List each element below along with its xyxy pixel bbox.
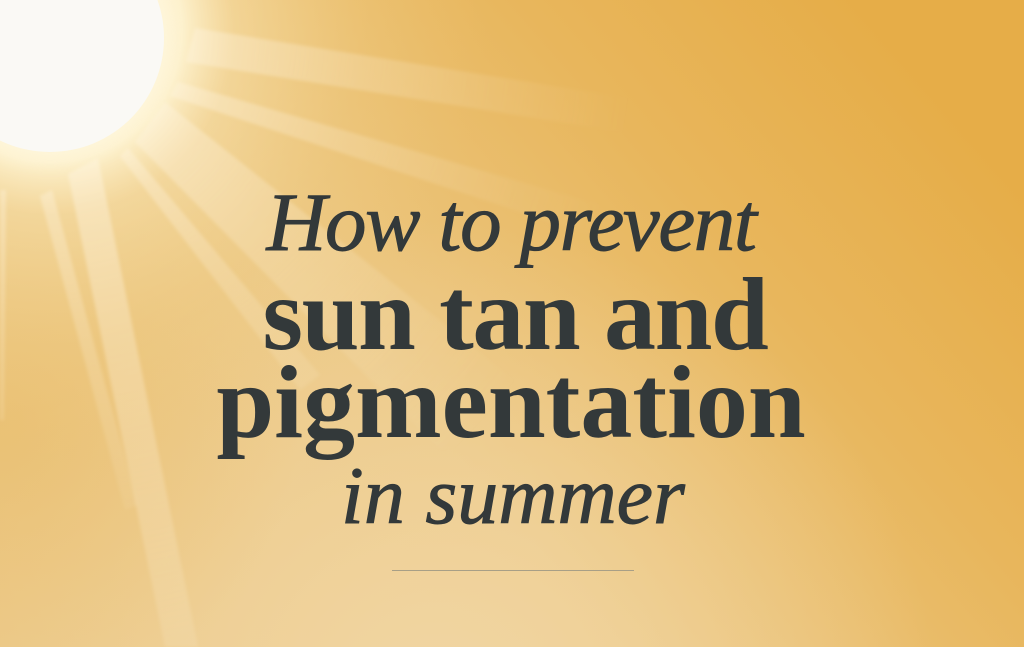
title line: pigmentation: pigmentation: [216, 345, 806, 460]
icon: sun disc: [0, 0, 172, 160]
title line: How to prevent: How to prevent: [266, 176, 756, 268]
title line: sun tan and: sun tan and: [263, 257, 767, 372]
divider line: [392, 570, 634, 571]
title line: in summer: in summer: [341, 450, 685, 541]
